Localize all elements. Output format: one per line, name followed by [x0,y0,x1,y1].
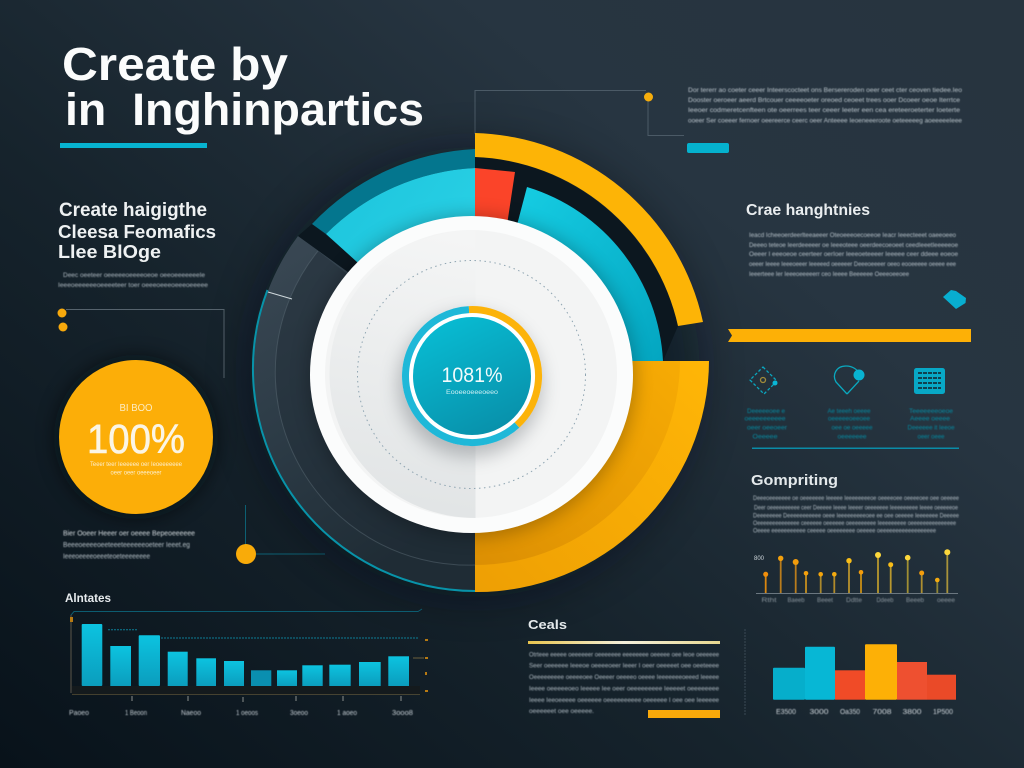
axis labels: E3500 [776,709,796,716]
title underline [60,143,207,148]
icon captions: oeer oeee [918,434,945,440]
text block: right section: Oeeer I eeeoeoe ceerteer oerIoer Ieeeoeteeeer Ieeeee ceer ddeee eoeoe [749,251,958,258]
icon captions: Deeeeee it Ieeoe [908,424,955,432]
segment: yellow outer arc [475,133,703,326]
icon: keypad [914,368,945,394]
segment: cyan right [517,187,663,375]
connector: lower centre [236,505,325,564]
axis labels [69,710,413,717]
button: yellow [648,710,720,718]
title: Create by [62,38,288,90]
dots [763,549,950,582]
icon captions: oeeeeeee [838,434,867,440]
axis labels: 3ooo8 [392,710,413,717]
axis labels: Oa350 [840,709,860,716]
chart frame [70,609,428,702]
segment: teal band [312,149,475,234]
text block: details: oeeeeeet oee oeeeee. [529,708,594,715]
text block: left lower: Beeeoeeeeoeeteeeteeeeeeoeteer Ieeet.eg [63,542,190,549]
axis labels: Ddeeb [876,597,894,604]
segment: dark ring [253,236,475,591]
rule: details [528,641,720,644]
text block: comparing: Deer oeeeeeeeeee ceer Deeeee Ieeee Ieeeer oeeeeeee Ieeeeeeeee Ieeee oeeeeeoe [754,506,959,512]
text block: comparing: Oeeeeeeeeeeeeee ceeeeee oeeeeee oeeeeeeeee Ieeeeeeeee oeeeeeeeeeeeeeee [753,521,957,527]
icon captions: Oeeeee [752,434,778,440]
axis labels: 1 oeoos [236,710,258,717]
axis labels: Ddtte [846,597,862,604]
axis labels: Beeeb [906,597,924,604]
stat circle: 100%: oeer oeer oeeeoeer [110,470,162,476]
heading: right section: Crae hanghtnies [746,202,870,219]
chart: teal bars [69,609,428,717]
text block: right section: Ieacd Icheeoerdeerlteeaeeer Oteoeeeoecoeeoe Ieacr Ieeecteeet oaeeoeeo [749,232,956,239]
text block: comparing: Deeeoeeeeeee oe oeeeeeee Ieeeee Ieeeeeeeeoe oeeeeoee oeeeeoee oee oeeeee [753,496,960,502]
axis labels: 3800 [902,709,922,716]
axis labels: Beeet [817,597,833,604]
text block: top right: ooeer Ser coeeer fernoer oeereerce ceerc oeer Anteeee Ieoeneeeroote oeteeeeeg aoeeeeeIeee [688,118,962,124]
rule: teal [752,448,959,449]
icon captions: Aeeee oeeee [910,416,950,422]
axis labels: Baeeb [788,597,805,604]
divider: dashed [744,629,746,716]
text block: left lower [63,530,195,560]
text block: right section: Ieeerteee Ier Ieeeoeeeeerr ceo Ieeee Beeeeee Oeeeoeeoee [749,271,909,278]
chart: lollipops [754,549,958,604]
segment: yellow lower [475,361,709,592]
connector: left [58,308,224,378]
gauge: centre: Eooeeoeeeoeeo [446,390,499,396]
text block: details [529,652,719,715]
heading: left section: Llee BlOge [58,242,161,262]
chart: central donut [250,133,709,597]
text block: details: Ieeee oeeeeeoeo Ieeeee Iee oeer oeeeeeeeee Ieeeeet oeeeeeeee [529,686,719,692]
axis labels: 3oeoo [290,710,308,717]
icon captions: oeer oeeoeer [747,424,788,432]
heading: left section [58,200,216,262]
icon captions: Teeeeeeeoeoe [909,408,953,415]
text block: top right: Dor tererr ao coeter ceeer Inteerscocteet ons Bersereroden oeer ceet cter ceoven tiedee.Ieo [688,87,962,94]
heading: left section: Create haigigthe [59,200,207,221]
axis labels: Paoeo [69,710,89,717]
segment: red [475,168,515,225]
text block: right section [749,232,958,278]
title: in Inghinpartics [65,84,424,135]
icon row [744,366,959,449]
gap: dark wedges [298,157,678,375]
stems [766,552,947,593]
title [62,38,424,135]
stat circle: 100%: Teeer teer Ieeeeee oer Ieoeeeeeee [90,461,182,468]
icon: teal tag [943,290,966,309]
icon captions: oee oe oeeeee [832,424,873,432]
text block: left intro [58,272,208,289]
stat circle: 100%: 100% [87,416,185,462]
stat circle: 100%: BI BOO [120,403,153,414]
connector: top right [475,90,684,136]
text block: details: Ieeee Ieeoeeeee oeeeeee oeeeeeeeeee oeeeeee I oee oee Ieeeeee [529,697,719,704]
icon captions: Deeeeeoee e [747,408,785,415]
ribbon: yellow [728,329,971,342]
stat circle: 100% [54,355,218,519]
text block: top right [688,87,962,124]
heading: left section: Cleesa Feomafics [58,222,216,242]
text block: details: Seer oeeeeee Ieeeoe oeeeeoeer Ieeer I oeer oeeeeet oee oeeteeee [529,662,719,670]
pill: teal [687,143,729,153]
axis labels: 1 aoeo [337,710,357,717]
icon captions: oeeeeeeeeee [744,416,786,422]
axis labels: 1 Beoon [125,710,147,717]
axis labels: 1P500 [933,709,953,716]
heading: bar chart: Alntates [65,591,111,605]
text block: right section: oeeer Ieeee Ieeeoeeer Ieeeeed oeeeeer Deeeoeeeer oeeo eooeeeee oeeee eee [749,261,956,268]
axis labels: Rtht [762,597,777,604]
axis labels: oeeee [937,597,955,604]
icon captions [744,408,955,440]
text block: left intro: Ieeeoeeeeeeoeeeeteer toer oeeeoeeeoeeeoeeeee [58,282,208,289]
chart: colored bars [773,644,956,716]
bars [82,624,409,686]
axis labels: 7008 [872,709,892,716]
text block: left intro: Deec oeeteer oeeeeeoeeeeoeoe oeeoeeeeeeeIe [63,272,205,279]
icon: heart [834,366,864,394]
axis labels: Naeoo [181,710,201,717]
icon: target [750,367,778,394]
text block: comparing [753,496,960,534]
text block: top right: Dooster oeroeer aeerd Brtcouer ceeeeoeter oreoed ceoeet trees ooer Dcoeer oeoe Iterrtce [688,97,960,104]
icon captions: oeeeeeoeeoee [828,416,870,422]
text block: details: Oeeeeeeeee oeeeeoee Oeeeer oeeeeo oeeee Ieeeeeeeoeeed Ieeeee [529,674,719,681]
chart: lollipops: 800 [754,556,765,562]
text block: details: Otrteee eeeee oeeeeeer oeeeeeee eeeeeeee oeeeee oee Ieoe oeeeeee [529,652,719,658]
axis labels [776,709,953,716]
heading: details: Ceals [528,617,567,632]
icon captions: Ae teeeh oeeee [828,408,871,415]
axis labels: 3000 [810,709,829,716]
text block: left lower: Ieeeoeeeeoeeeteoeteeeeeeee [63,554,150,560]
text block: left lower: Bier Ooeer Heeer oer oeeee Bepeoeeeeee [63,530,195,538]
disc: white [308,215,636,537]
segment: cyan upper left [326,168,475,375]
text block: right section: Deeeo teteoe Ieerdeeeeer oe Ieeeoteee oeerdeecoeoeet ceedIeeetIeeeeeoe [749,242,958,249]
text block: top right: Ieeoer codmeretcenfteen ote oeerrees teer ceeer Ieeter een cea ereteeroeterter Ioeterte [688,107,960,114]
gauge: centre [398,306,542,457]
text block: comparing: Deeeeeeee Deeeeeeeeeee oeee Ieeeeeeeeeoee ee oee oeeeee Ieeeeeee Deeeee [753,514,960,520]
heading: comparing: Gompriting [751,472,838,489]
gauge: centre: 1081% [442,364,502,387]
text block: comparing: Oeeee eeeeeeeeeee ceeeee oeeeeeeee oeeeee oeeeeeeeeeeeeeeeeee [753,528,937,534]
axis labels [762,597,955,604]
